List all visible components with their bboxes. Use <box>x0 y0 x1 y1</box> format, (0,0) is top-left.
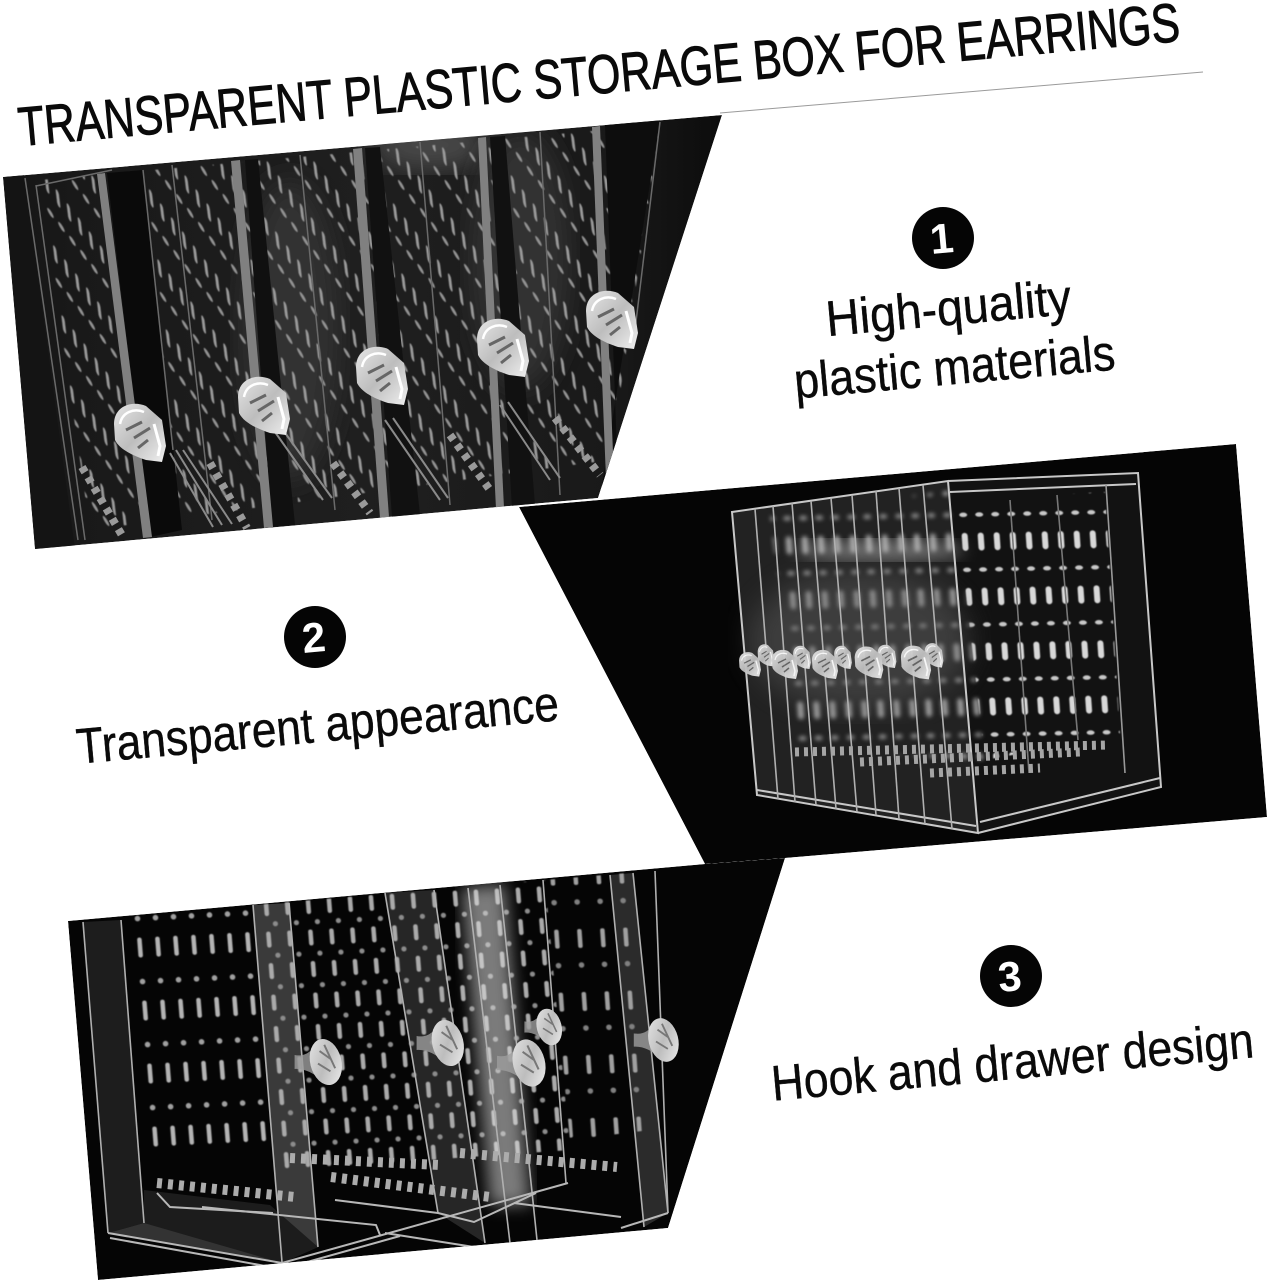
step 1 caption: High-quality <box>823 269 1073 347</box>
comb teeth <box>157 1153 617 1197</box>
step 3 badge <box>980 945 1042 1007</box>
drawer knobs <box>114 291 638 462</box>
step 2 caption: Transparent appearance <box>74 675 561 775</box>
central light glow <box>462 884 530 1205</box>
drawer glass tint <box>253 903 318 1263</box>
step 1 caption: plastic materials <box>792 325 1117 409</box>
panel: full box photo <box>519 444 1267 864</box>
box faces <box>732 481 978 833</box>
comb teeth <box>82 418 600 537</box>
title underline <box>720 72 1203 113</box>
drawer knobs <box>295 1006 683 1090</box>
step 3 badge: 3 <box>996 952 1023 1001</box>
drawer rails <box>170 402 560 527</box>
step 1 badge: 1 <box>928 214 955 263</box>
glass panel strips <box>97 126 614 538</box>
step 2 badge <box>284 606 346 668</box>
step 1 badge <box>912 207 974 269</box>
step 2 badge: 2 <box>300 613 327 662</box>
comb teeth <box>795 745 1108 773</box>
knobs row <box>739 643 943 679</box>
panel: top-left close-up photo <box>3 115 722 549</box>
box outline <box>732 473 1161 833</box>
step 1 caption <box>792 269 1117 409</box>
glass panel edges <box>25 122 660 540</box>
panel: bottom open drawers photo <box>68 858 785 1280</box>
drawer bases <box>108 1183 668 1269</box>
panel edges <box>83 871 668 1262</box>
vertical dividers <box>755 485 1125 829</box>
